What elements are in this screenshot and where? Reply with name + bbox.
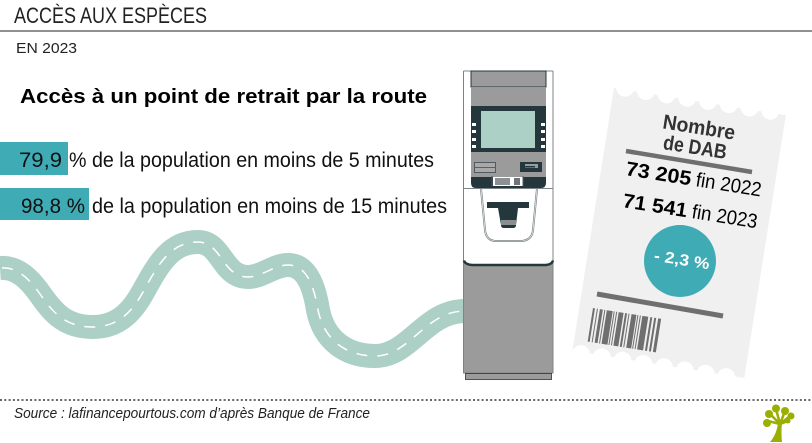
receipt: barcode <box>588 308 661 352</box>
receipt: change badge <box>644 225 716 297</box>
bar: 98,8 % <box>0 188 89 220</box>
ATM: keypad <box>492 176 523 186</box>
receipt: heading <box>661 111 737 164</box>
ATM: card reader <box>520 162 542 172</box>
ATM: receipt slot <box>474 162 496 172</box>
bar: 79,9 % <box>0 142 68 175</box>
receipt: count end 2023: 71 541 fin 2023 <box>621 190 759 233</box>
receipt: heading: de DAB <box>662 131 728 164</box>
ATM: cash dispenser <box>481 189 537 241</box>
receipt: top rule <box>626 151 752 172</box>
ATM: screen <box>481 111 535 148</box>
receipt: change badge: - 2,3 % <box>653 248 711 273</box>
source: Source : lafinancepourtous.com d’après Banque de France <box>14 406 370 422</box>
ATM: top panels <box>471 71 546 87</box>
receipt: count end 2022: 73 205 fin 2022 <box>624 158 763 201</box>
label: 15 minutes: de la population en moins de 15 minutes <box>92 195 447 218</box>
ATM: body outline <box>464 71 553 262</box>
ATM: side buttons <box>472 123 545 148</box>
stat row: 5 minutes <box>0 142 434 175</box>
ATM: control panel <box>471 152 546 188</box>
ATM illustration <box>464 71 553 380</box>
receipt: bottom rule <box>597 294 723 316</box>
receipt <box>571 77 788 389</box>
value: 98,8 %: 98,8 % <box>21 195 85 218</box>
stat row: 15 minutes <box>0 188 447 220</box>
subtitle: year: EN 2023 <box>16 40 77 57</box>
label: 5 minutes: % de la population en moins de 5 minutes <box>69 149 434 172</box>
title: ACCÈS AUX ESPÈCES <box>14 3 207 28</box>
logo: tree <box>763 404 794 442</box>
dotted separator <box>0 399 812 401</box>
receipt: heading: Nombre <box>661 111 737 145</box>
heading: Accès à un point de retrait par la route <box>20 85 427 108</box>
value: 79,9: 79,9 <box>19 149 62 172</box>
ATM: screen housing <box>471 106 546 152</box>
ATM: lower cabinet <box>464 260 553 380</box>
receipt: paper <box>571 77 788 389</box>
road illustration <box>0 242 465 356</box>
